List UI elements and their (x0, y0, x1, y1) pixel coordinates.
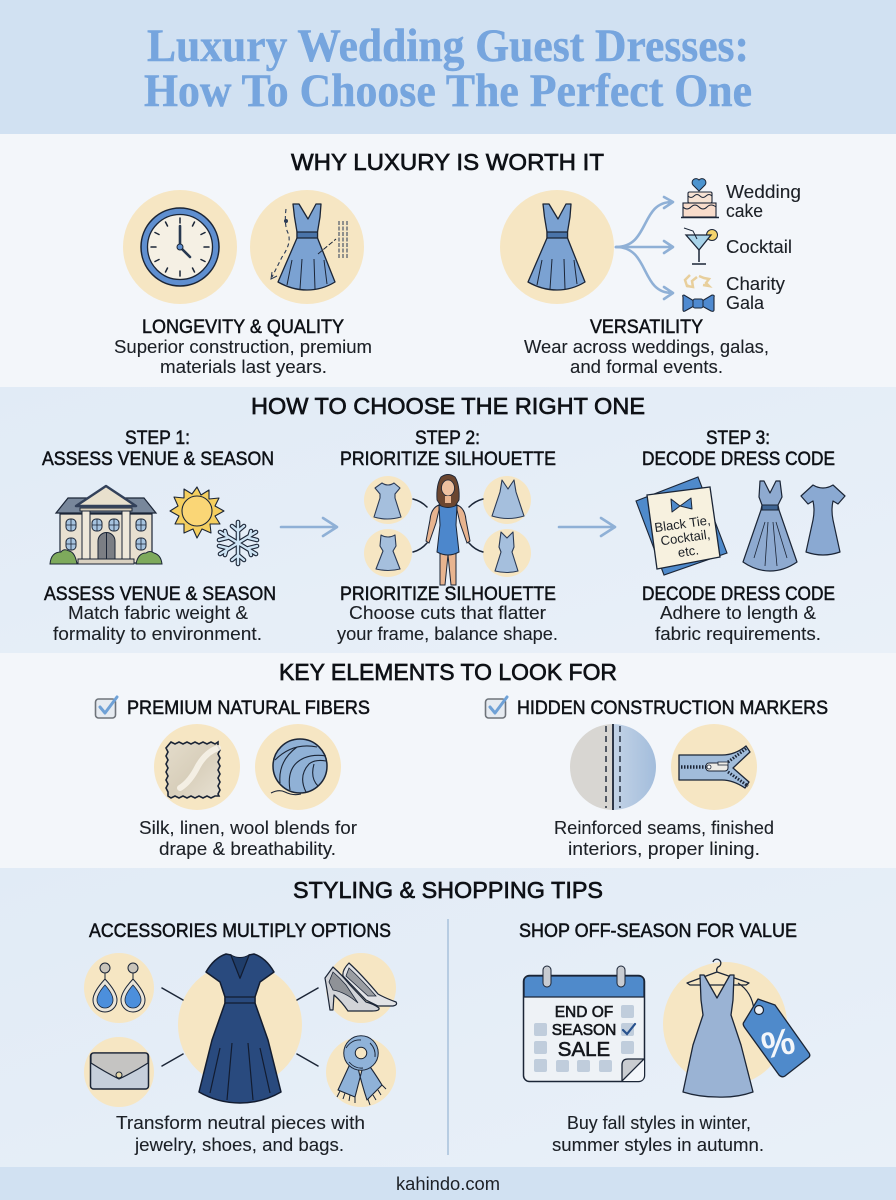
text: construction description: interiors, proper lining. (568, 839, 760, 859)
text: longevity and quality: materials last years. (160, 357, 327, 377)
heading: how to choose: HOW TO CHOOSE THE RIGHT ONE (251, 393, 645, 419)
title: How To Choose The Perfect One (144, 65, 752, 117)
divider (447, 919, 449, 1155)
icon: dress on hanger with price tag (663, 959, 810, 1097)
title: Luxury Wedding Guest Dresses: (147, 20, 749, 72)
icon: zipper (671, 724, 757, 810)
title (144, 20, 752, 117)
icon: reinforced seam (570, 724, 656, 810)
step 3 heading (642, 428, 835, 470)
icon: sale calendar: SALE (558, 1038, 610, 1061)
icon: dress code card: Black Tie, (653, 512, 711, 535)
icon: versatile dress (500, 190, 614, 304)
text: assess venue and season: formality to environment. (53, 624, 262, 644)
title band (0, 0, 896, 134)
text: fibers description: Silk, linen, wool blends for (139, 818, 357, 838)
arrow: step 1 to 2 (281, 518, 337, 536)
icon: venue building (50, 486, 162, 564)
text: decode dress code: Adhere to length & (660, 603, 816, 623)
icon: short dress (801, 485, 845, 555)
labels: occasions (726, 182, 801, 313)
text: longevity and quality: LONGEVITY & QUALITY (142, 317, 344, 338)
panel: how to choose (0, 387, 896, 653)
subheading: shop off-season: SHOP OFF-SEASON FOR VALUE (519, 921, 797, 942)
step 1 heading: ASSESS VENUE & SEASON (42, 449, 274, 470)
icon: earrings (84, 953, 154, 1023)
heading: key elements: KEY ELEMENTS TO LOOK FOR (279, 659, 617, 685)
footer: kahindo.com (396, 1174, 500, 1194)
step 3 heading: DECODE DRESS CODE (642, 449, 835, 470)
icon: dress code card: Cocktail, (660, 527, 711, 548)
text: prioritize silhouette: PRIORITIZE SILHOUETTE (340, 584, 556, 605)
icon: cocktail (684, 228, 718, 264)
text: shop off-season description: summer styles in autumn. (552, 1135, 764, 1155)
icon: checkbox fibers (96, 697, 117, 718)
text: accessories description: Transform neutral pieces with (116, 1113, 365, 1133)
text: versatility (524, 317, 769, 377)
text: longevity and quality (114, 317, 372, 377)
icon: woman figure (426, 474, 470, 585)
icon: sale calendar: END OF (555, 1004, 613, 1021)
step 2 heading: STEP 2: (415, 428, 480, 449)
icon: snowflake (219, 522, 257, 564)
icon: scarf (326, 1037, 396, 1107)
icon: clutch (84, 1037, 154, 1107)
subheading: premium natural fibers: PREMIUM NATURAL FIBERS (127, 698, 370, 719)
icon: long gown (743, 481, 797, 571)
icon: dress code card (636, 477, 727, 575)
icon: sun (170, 487, 224, 538)
text: shop off-season description: Buy fall styles in winter, (567, 1113, 751, 1133)
icon: checkbox construction (486, 697, 507, 718)
step 2 heading (340, 428, 556, 470)
text: decode dress code: fabric requirements. (655, 624, 821, 644)
icon: silhouette options (364, 476, 531, 577)
labels: occasions: Gala (726, 293, 765, 313)
text: versatility: VERSATILITY (590, 317, 703, 338)
text: prioritize silhouette: your frame, balance shape. (337, 624, 558, 644)
text: fibers description: drape & breathability. (159, 839, 336, 859)
text: accessories description (116, 1113, 365, 1155)
footer (0, 1167, 896, 1200)
heading: why luxury: WHY LUXURY IS WORTH IT (291, 149, 604, 175)
labels: occasions: Cocktail (726, 237, 792, 257)
text: prioritize silhouette (337, 584, 558, 644)
icon: high heels (325, 953, 397, 1023)
text: decode dress code (642, 584, 835, 644)
icon: dress code card: etc. (677, 542, 700, 560)
step 1 heading: STEP 1: (125, 428, 190, 449)
icon: clock (123, 190, 237, 304)
text: decode dress code: DECODE DRESS CODE (642, 584, 835, 605)
step 1 heading (42, 428, 274, 470)
arrow: step 2 to 3 (559, 518, 615, 536)
text: assess venue and season: ASSESS VENUE & SEASON (44, 584, 276, 605)
icon: wedding cake (681, 179, 719, 218)
icon: silk swatch (154, 724, 240, 810)
icon: gala bow tie (683, 275, 714, 311)
text: construction description (554, 818, 774, 859)
icon: sale calendar (524, 966, 644, 1082)
labels: occasions: Charity (726, 274, 785, 294)
subheading: accessories: ACCESSORIES MULTIPLY OPTIONS (89, 921, 391, 942)
step 3 heading: STEP 3: (706, 428, 770, 449)
step 2 heading: PRIORITIZE SILHOUETTE (340, 449, 556, 470)
arrows: versatility branches (616, 197, 673, 299)
labels: occasions: Wedding (726, 182, 801, 202)
text: assess venue and season: Match fabric weight & (68, 603, 248, 623)
panel: why luxury is worth it (0, 134, 896, 387)
text: versatility: and formal events. (570, 357, 723, 377)
icon: navy dress with circle (162, 954, 318, 1103)
text: fibers description (139, 818, 357, 859)
panel: key elements (0, 653, 896, 868)
subheading: hidden construction markers: HIDDEN CONSTRUCTION MARKERS (517, 698, 828, 719)
icon: sale calendar: SEASON (552, 1022, 616, 1039)
text: versatility: Wear across weddings, galas, (524, 337, 769, 357)
text: shop off-season description (552, 1113, 764, 1155)
icon: dress on hanger with price tag: % (758, 1020, 798, 1067)
text: construction description: Reinforced seams, finished (554, 818, 774, 838)
text: prioritize silhouette: Choose cuts that flatter (349, 603, 546, 623)
labels: occasions: cake (726, 201, 763, 221)
text: longevity and quality: Superior construction, premium (114, 337, 372, 357)
icon: dress with stitching (250, 190, 364, 304)
heading: styling tips: STYLING & SHOPPING TIPS (293, 877, 603, 903)
text: accessories description: jewelry, shoes, and bags. (134, 1135, 344, 1155)
panel: styling and shopping tips (0, 868, 896, 1167)
icon: yarn ball (255, 724, 341, 810)
text: assess venue and season (44, 584, 276, 644)
